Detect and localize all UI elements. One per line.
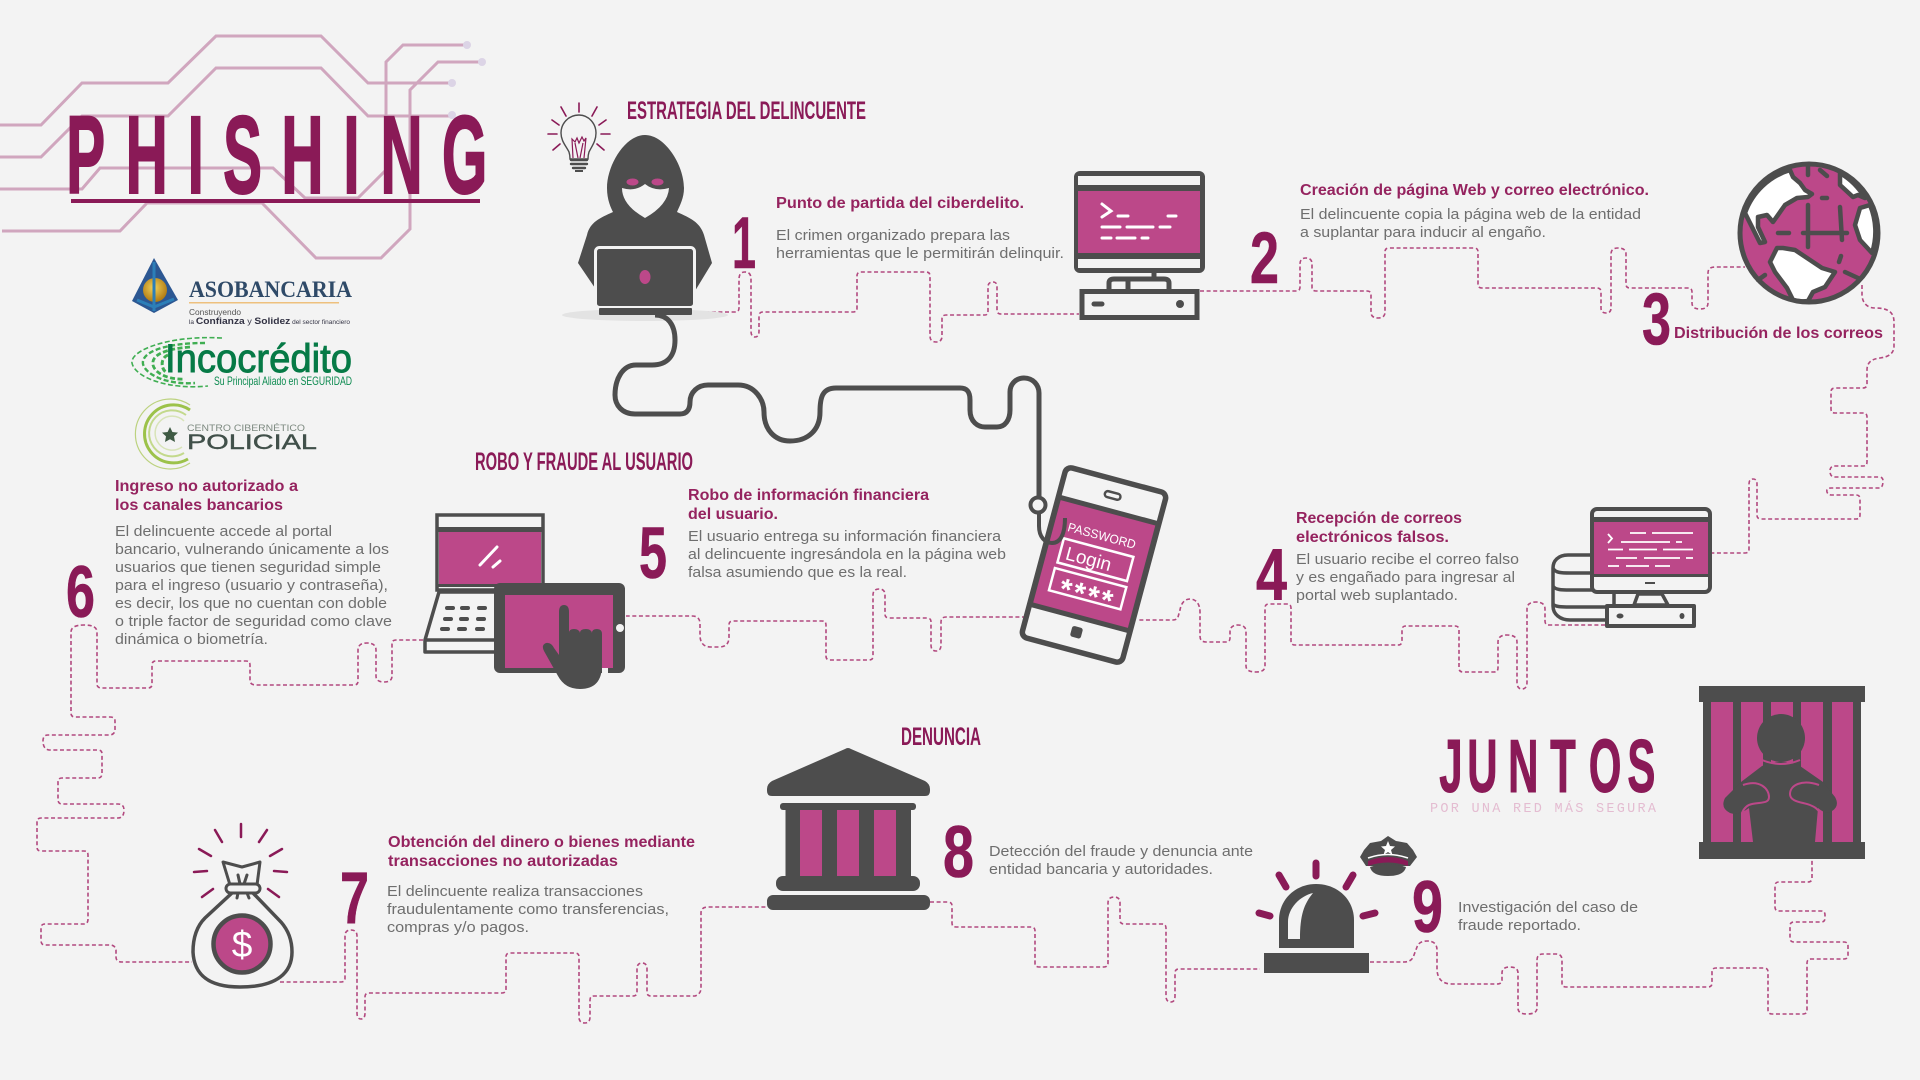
text block: step 7: Obtención del dinero o bienes mediante [388,834,695,851]
text block: step 5 [688,487,1006,581]
text block: step 2: a suplantar para inducir al engaño. [1300,225,1546,241]
text block: step 4: El usuario recibe el correo falso [1296,552,1519,568]
dashed route phone to tablet [626,589,1026,660]
dashed route 4 to 5 [1138,599,1605,689]
icon: money bag [193,824,292,987]
text block: step 8 [989,844,1253,878]
dashed route 5 to 6 [37,625,423,962]
logo: Centro Cibernético Policial: CENTRO CIBERNÉTICO [187,423,305,433]
text block: step 9 [1458,900,1638,934]
logo: Centro Cibernético Policial: POLICIAL [187,431,317,454]
heading: robo y fraude al usuario: ROBO Y FRAUDE AL USUARIO [475,448,693,476]
logo: Asobancaria: la Confianza y Solidez del sector financiero [189,316,351,327]
text block: step 6: o triple factor de seguridad como clave [115,614,392,630]
text block: step 6: es decir, los que no cuentan con doble [115,596,387,612]
number 8: 8 [943,812,974,893]
text block: step 7: fraudulentamente como transferencias, [387,902,669,918]
text block: step 2 [1300,182,1649,241]
dashed route 8 to 9 [930,897,1260,1002]
number 4: 4 [1256,535,1287,616]
text block: step 5: al delincuente ingresándola en la página web [688,547,1006,563]
icon: laptop and tablet with hand [425,515,625,689]
text block: step 2: El delincuente copia la página web de la entidad [1300,207,1641,223]
text block: step 4: portal web suplantado. [1296,588,1458,604]
icon: smartphone with hook [1021,467,1167,663]
text block: step 9: Investigación del caso de [1458,900,1638,916]
text block: step 1 [776,195,1064,262]
icon: bank [767,748,930,910]
logo: Asobancaria: Construyendo [189,308,242,317]
text block: step 4: y es engañado para ingresar al [1296,570,1515,586]
icon: smartphone with hook: Login [1063,544,1114,576]
text block: step 9: fraude reportado. [1458,918,1581,934]
text block: step 8: Detección del fraude y denuncia ante [989,844,1253,860]
text block: step 6: bancario, vulnerando únicamente a los [115,542,389,558]
icon: computer with database, step 4 [1553,509,1710,626]
icon: computer, step 2 [1074,171,1205,318]
text block: step 5: El usuario entrega su información financiera [688,529,1002,545]
text block: step 7: El delincuente realiza transacciones [387,884,643,900]
title: PHISHING: PHISHING [66,93,487,217]
cable from laptop to hook [615,315,1039,498]
number 6: 6 [66,552,95,633]
icon: globe [1740,164,1878,302]
text block: step 7 [387,834,695,936]
text block: step 1: herramientas que le permitirán delinquir. [776,246,1064,262]
text block: step 4: Recepción de correos [1296,510,1462,527]
text block: step 5: Robo de información financiera [688,487,929,504]
text block: step 6: dinámica o biometría. [115,632,268,648]
subtitle: por una red mas segura: POR UNA RED MÁS SEGURA [1430,801,1657,817]
logo: Incocrédito: Incocrédito [165,337,352,381]
logo: Centro Cibernético Policial [135,399,317,469]
dashed route 1 to 2 [692,272,1079,342]
heading: estrategia del delincuente: ESTRATEGIA DEL DELINCUENTE [627,97,866,125]
text block: step 6: los canales bancarios [115,497,283,514]
text block: step 8: entidad bancaria y autoridades. [989,862,1213,878]
icon: money bag: $ [232,924,252,965]
icon: smartphone with hook: **** [1055,573,1116,618]
heading: denuncia: DENUNCIA [901,723,981,751]
text block: step 6: El delincuente accede al portal [115,524,332,540]
text block: step 4: electrónicos falsos. [1296,529,1449,546]
text block: step 5: del usuario. [688,506,778,523]
number 2: 2 [1250,218,1279,299]
number 7: 7 [340,858,369,939]
text block: step 5: falsa asumiendo que es la real. [688,565,907,581]
icon: smartphone with hook: PASSWORD [1066,520,1137,552]
text block: step 6: para el ingreso (usuario y contraseña), [115,578,388,594]
dashed route 7 to 8 [280,907,767,1023]
number 1: 1 [732,203,756,284]
icon: police siren [1259,863,1375,973]
logo: Asobancaria: ASOBANCARIA [189,277,352,302]
text block: step 6: usuarios que tienen seguridad simple [115,560,381,576]
text block: step 7: compras y/o pagos. [387,920,529,936]
text block: step 6: Ingreso no autorizado a [115,478,298,495]
icon: light bulb [548,103,610,171]
title: juntos: JUNTOS [1439,724,1655,808]
number 9: 9 [1412,867,1443,948]
number 3: 3 [1642,279,1671,360]
number 5: 5 [639,513,667,594]
circuit lines behind title [0,36,486,258]
dashed route 9 to jail [1370,859,1848,1014]
icon: police cap [1360,836,1417,876]
text block: step 7: transacciones no autorizadas [388,853,618,870]
text block: step 1: Punto de partida del ciberdelito. [776,195,1024,212]
logo: Incocrédito: Su Principal Aliado en SEGURIDAD [214,374,352,388]
text block: step 1: El crimen organizado prepara las [776,228,1010,244]
icon: hooded hacker with laptop [562,135,728,321]
text block: step 6 [115,478,392,648]
logo: Asobancaria [132,258,352,327]
text block: step 2: Creación de página Web y correo electrónico. [1300,182,1649,199]
text block: step 4 [1296,510,1519,604]
dashed route 3 to 4 [1712,285,1894,553]
dashed route 2 to 3 [1200,248,1745,318]
text: step 3: Distribución de los correos [1674,325,1883,342]
icon: person behind bars [1699,686,1865,859]
